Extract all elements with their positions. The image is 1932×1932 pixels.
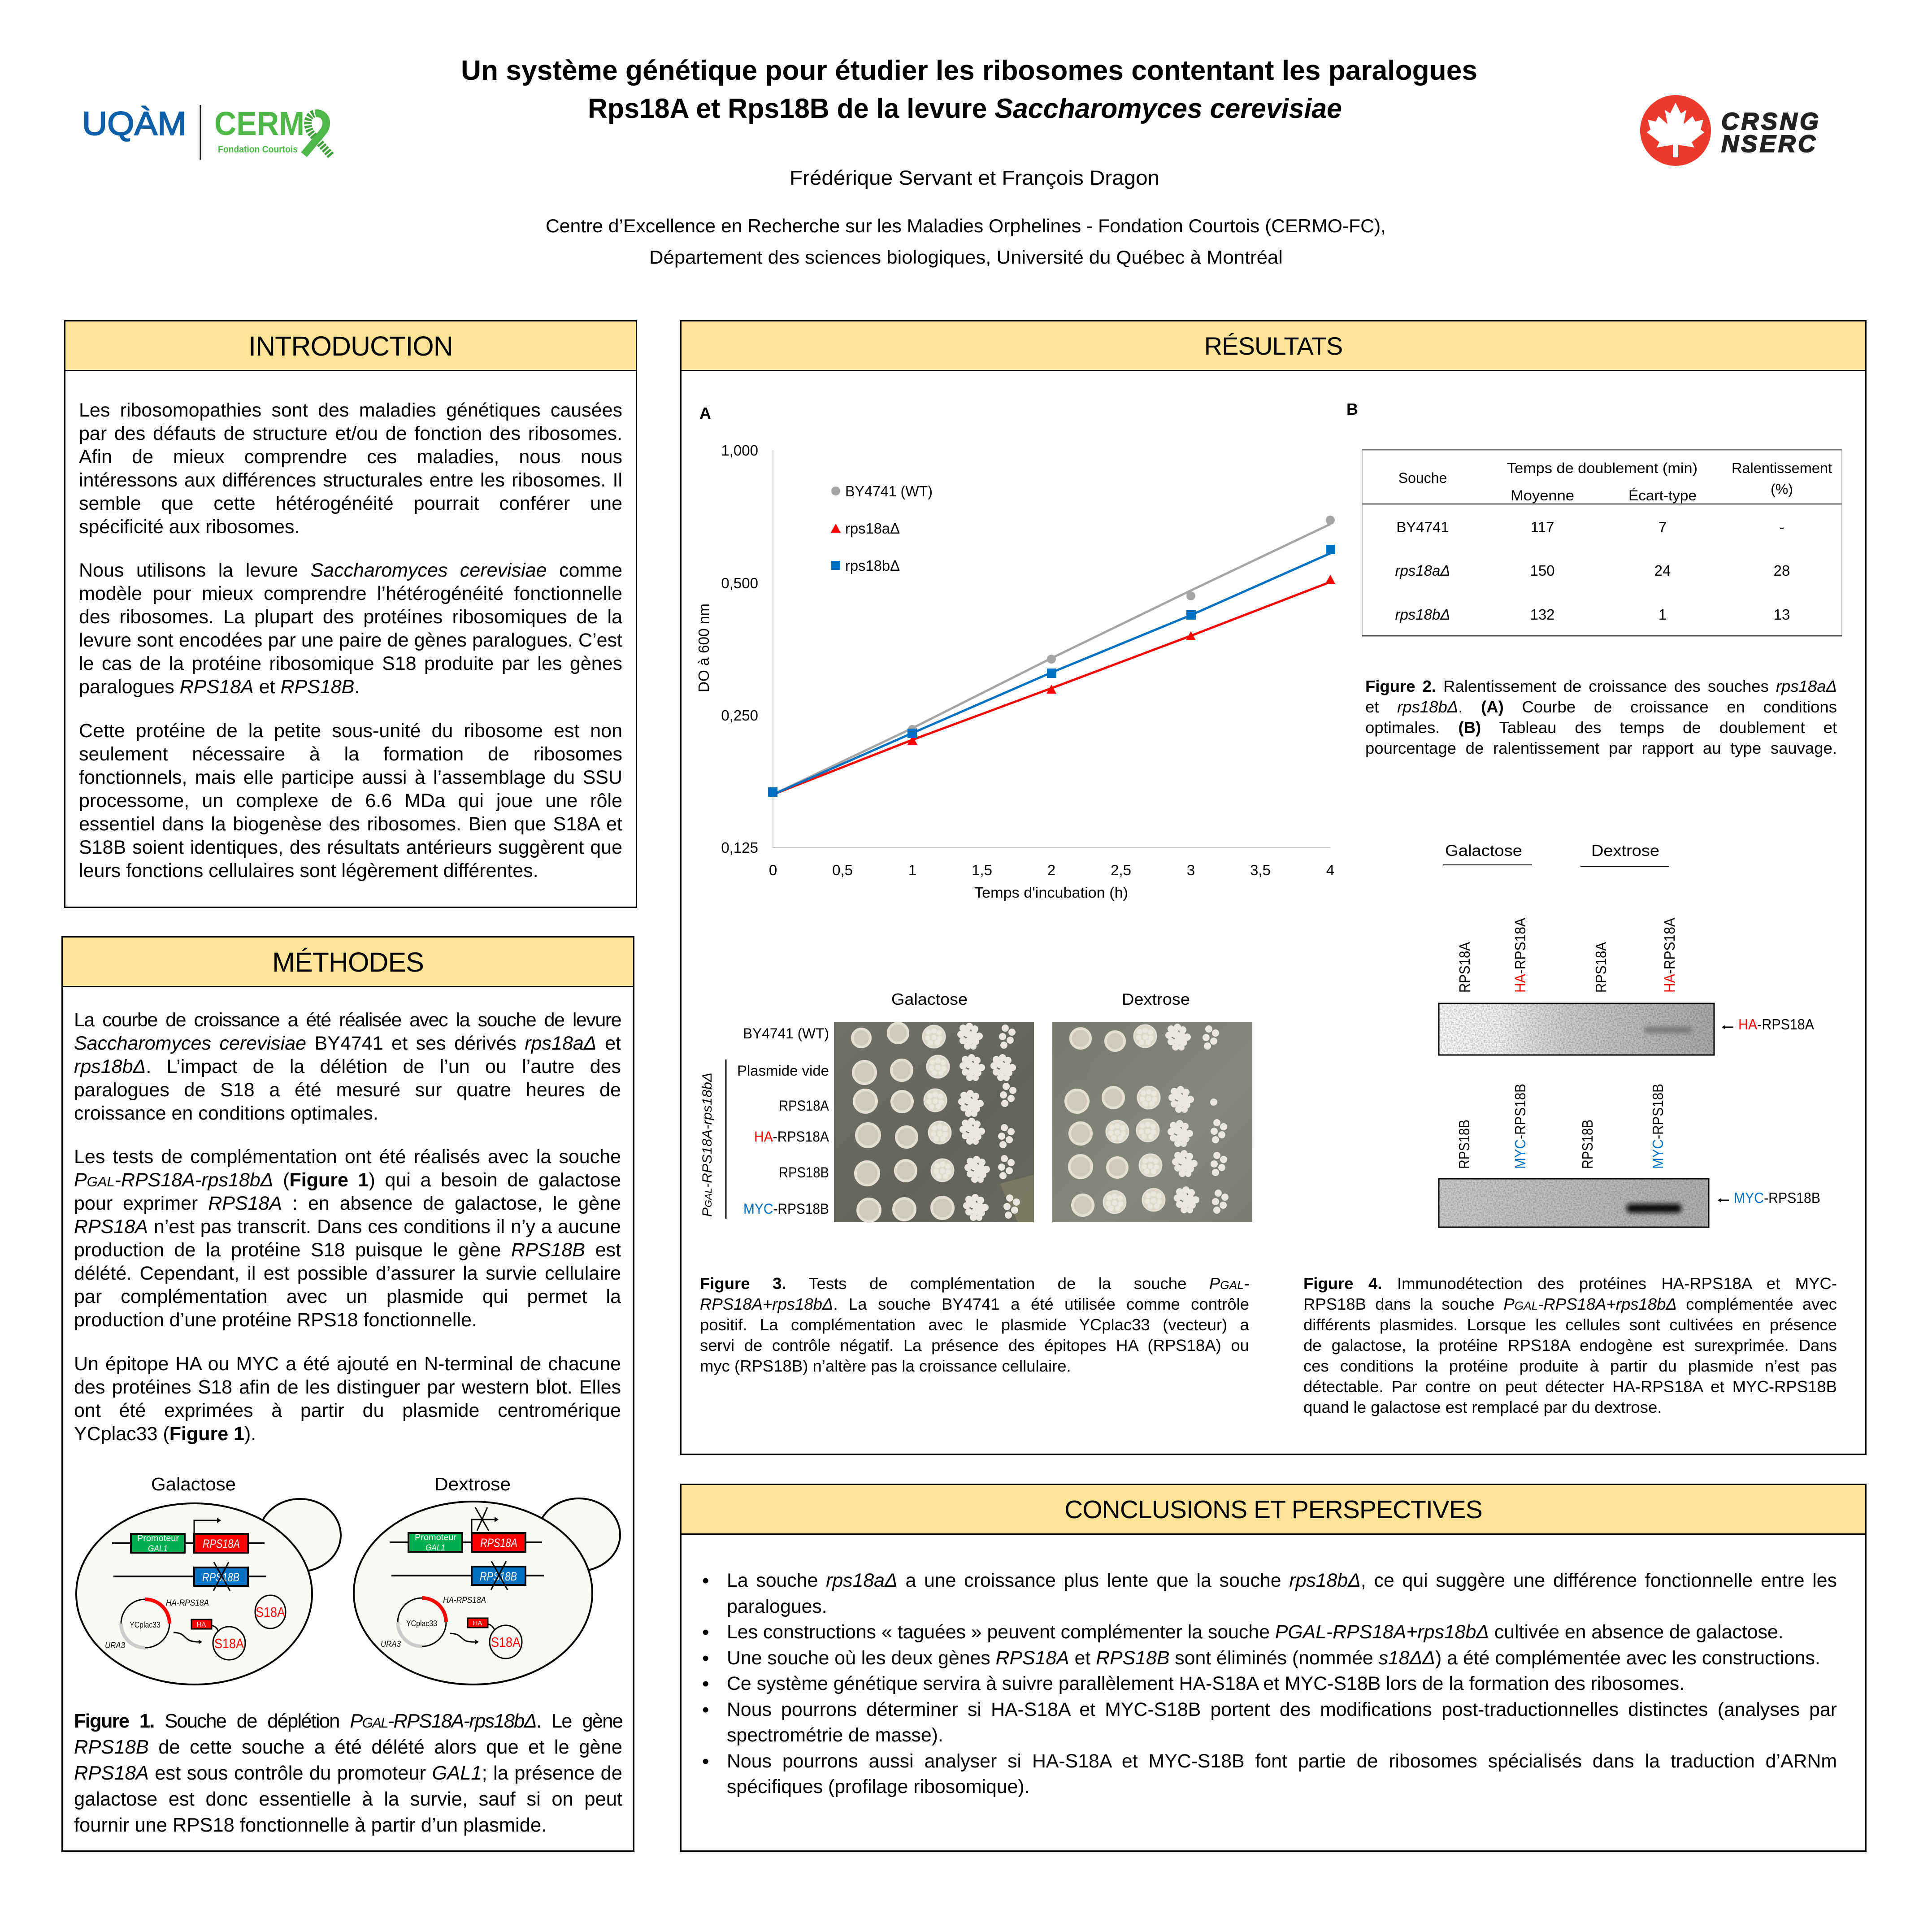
figure 4: western blots <box>1435 838 1829 1233</box>
text block: introduction paragraph 2: le cas de la protéine ribosomique S18 produite par les gènes <box>79 653 622 674</box>
logo text: CRSNG: CRSNG <box>1721 108 1819 135</box>
caption: figure 1: RPS18B de cette souche a été délété alors que et le gène <box>74 1737 622 1758</box>
text block: méthodes paragraph 2: pour exprimer RPS18A : en absence de galactose, le gène <box>74 1193 621 1214</box>
text block: méthodes paragraph 3: ont été exprimées à partir du plasmide centromérique <box>74 1400 621 1421</box>
text block: méthodes paragraph 2 <box>74 1145 621 1332</box>
text block: introduction paragraph 2: des ribosomes. La plupart des protéines ribosomiques de la <box>79 606 622 628</box>
arrow: expression <box>174 1632 199 1642</box>
heading: résultats <box>680 320 1867 371</box>
caption: figure 3: RPS18A+rps18bΔ. La souche BY4741 a été utilisée comme contrôle <box>700 1295 1249 1313</box>
text block: introduction paragraph 3: leurs fonctions cellulaires sont légèrement différentes. <box>79 860 538 881</box>
text block: introduction paragraph 1: par des défauts de structure et/ou de fonction des ribosomes. <box>79 423 622 444</box>
caption: figure 1: Figure 1. Souche de déplétion PGAL-RPS18A-rps18bΔ. Le gène <box>74 1711 622 1732</box>
table header: Temps de doublement (min) <box>1507 460 1698 476</box>
legend: rps18aΔ <box>845 520 900 537</box>
authors and affiliation <box>538 161 1394 269</box>
RPS18B deleted gene box: RPS18B <box>202 1571 239 1584</box>
table rows: - <box>1779 519 1784 535</box>
text block: introduction paragraph 3: essentiel dans la biogenèse des ribosomes. Bien que S18A et <box>79 813 622 835</box>
heading: résultats: RÉSULTATS <box>1204 332 1342 360</box>
text block: méthodes paragraph 3: des protéines S18 afin de les distinguer par western blot. Elles <box>74 1376 621 1398</box>
table header <box>1398 460 1832 504</box>
text block: méthodes paragraph 1: Saccharomyces cerevisiae BY4741 et ses dérivés rps18aΔ et <box>74 1033 621 1054</box>
lane labels: MYC blot <box>1456 1084 1666 1169</box>
label: Dextrose: Dextrose <box>1122 990 1190 1008</box>
text block: méthodes paragraph 2: délété. Cependant, il est possible d’assurer la survie cellulaire <box>74 1263 621 1284</box>
arrow: expression <box>450 1633 476 1642</box>
table: doubling times B <box>1347 399 1854 641</box>
lane labels: HA blot: HA-RPS18A <box>1512 918 1528 993</box>
title <box>448 45 1489 130</box>
plasmid YCplac33 <box>381 1596 486 1649</box>
y axis tick labels: 0,500 <box>721 575 758 591</box>
table header: Moyenne <box>1511 487 1574 504</box>
plasmid YCplac33: URA3 <box>105 1641 125 1650</box>
plasmid YCplac33: YCplac33 <box>406 1619 437 1628</box>
text block: introduction paragraph 3: seulement nécessaire à la formation de ribosomes <box>79 743 622 765</box>
bullet list: conclusions: Les constructions « taguées » peuvent complémenter la souche PGAL-RPS18A+rps18bΔ cultivée en absence de galactose. <box>727 1621 1784 1643</box>
heading: méthodes: MÉTHODES <box>272 947 424 977</box>
cell: galactose <box>76 1499 341 1685</box>
bullet list: conclusions: Une souche où les deux gènes RPS18A et RPS18B sont éliminés (nommée s18ΔΔ) a été complémentée avec les constructions. <box>727 1647 1820 1669</box>
table header: Ralentissement <box>1732 460 1832 476</box>
bullet list: conclusions: Nous pourrons déterminer si HA-S18A et MYC-S18B portent des modifications post-traductionnelles distinctes (analyses par <box>727 1698 1837 1720</box>
text block: introduction paragraph 2: modèle pour mieux comprendre l’hétérogénéité fonctionnelle <box>79 583 622 604</box>
panel: conclusions et perspectives: • <box>702 1647 709 1669</box>
text block: méthodes paragraph 2: RPS18A n’est pas transcrit. Dans ces conditions il n’y a aucune <box>74 1216 621 1237</box>
x axis tick labels: 4 <box>1326 862 1334 878</box>
blot: HA <box>1439 1003 1714 1055</box>
caption: figure 2: et rps18bΔ. (A) Courbe de croissance en conditions <box>1365 698 1837 716</box>
x axis title: Temps d'incubation (h) <box>974 884 1128 901</box>
caption: figure 1: fournir une RPS18 fonctionnelle à partir d’un plasmide. <box>74 1815 547 1836</box>
strain labels <box>737 1025 829 1217</box>
RPS18A gene box <box>472 1533 525 1552</box>
legend: BY4741 (WT) <box>845 483 933 499</box>
lane labels: MYC blot: MYC-RPS18B <box>1650 1084 1666 1169</box>
caption: figure 3: servi de contrôle négatif. La présence des épitopes HA (RPS18A) ou <box>700 1336 1249 1355</box>
caption: figure 3: Figure 3. Tests de complémentation de la souche PGAL- <box>700 1274 1249 1293</box>
strain labels: MYC-RPS18B <box>743 1201 829 1217</box>
logo: CRSNG NSERC <box>1637 92 1825 170</box>
table rows <box>1395 519 1790 623</box>
text block: introduction paragraph 2 <box>79 559 622 699</box>
x axis tick labels: 3,5 <box>1250 862 1271 878</box>
band label: MYC-RPS18B: MYC-RPS18B <box>1734 1190 1820 1206</box>
plate: dextrose <box>1052 1022 1252 1222</box>
bullet list: conclusions: paralogues. <box>727 1595 827 1617</box>
caption: figure 4: différents plasmides. Lorsque les cellules sont cultivées en présence <box>1303 1315 1837 1334</box>
table rows: 24 <box>1654 562 1671 579</box>
plate: galactose <box>834 1022 1034 1222</box>
text block: méthodes paragraph 2: PGAL-RPS18A-rps18bΔ (Figure 1) qui a besoin de galactose <box>74 1169 621 1191</box>
title line 1: Un système génétique pour étudier les ribosomes contentant les paralogues <box>461 55 1477 86</box>
icon: green ribbon <box>304 113 331 156</box>
text block: méthodes paragraph 2: production de la protéine S18 puisque le gène RPS18B est <box>74 1239 621 1261</box>
table rows: 13 <box>1774 606 1790 623</box>
strain labels: HA-RPS18A <box>754 1129 829 1145</box>
table rules <box>1362 450 1842 636</box>
y axis tick labels: 1,000 <box>721 442 758 459</box>
text block: introduction paragraph 3: Cette protéine de la petite sous-unité du ribosome est non <box>79 720 622 742</box>
text block: méthodes paragraph 3: Un épitope HA ou MYC a été ajouté en N-terminal de chacune <box>74 1353 621 1375</box>
figure 1: yeast cell schematics <box>72 1471 628 1695</box>
RPS18B deleted gene box <box>472 1561 525 1590</box>
HA tagged S18A protein: S18A <box>214 1636 244 1651</box>
text block: méthodes paragraph 1 <box>74 1008 621 1125</box>
axes <box>773 450 1330 847</box>
cell: dextrose <box>354 1498 620 1685</box>
panel: introduction <box>64 320 637 908</box>
caption: figure 4: ces conditions la protéine produite à partir du plasmide n’est pas <box>1303 1357 1837 1375</box>
text block: méthodes paragraph 2: production d’une protéine RPS18 fonctionnelle. <box>74 1309 477 1331</box>
bullet list: conclusions: spectrométrie de masse). <box>727 1724 943 1746</box>
caption: figure 2: optimales. (B) Tableau des temps de doublement et <box>1365 718 1837 737</box>
panel: conclusions et perspectives: • <box>702 1698 709 1721</box>
text block: introduction paragraph 1 <box>79 399 622 538</box>
series: rps18a red <box>773 575 1335 795</box>
caption: figure 4: RPS18B dans la souche PGAL-RPS18A+rps18bΔ complémentée avec <box>1303 1295 1837 1313</box>
arrow: transcription blocked <box>472 1507 499 1533</box>
HA tagged S18A protein: S18A <box>491 1634 521 1650</box>
caption: figure 4: Figure 4. Immunodétection des protéines HA-RPS18A et MYC- <box>1303 1274 1837 1293</box>
promoter GAL1 box <box>408 1533 462 1553</box>
caption: figure 2 <box>1365 676 1837 759</box>
text block: introduction paragraph 1: intéressons aux différences structurales entre les ribosomes. Il <box>79 469 622 491</box>
table rows: rps18aΔ <box>1395 562 1450 579</box>
caption: figure 4: de galactose, la protéine RPS18A endogène est surexprimée. Dans <box>1303 1336 1837 1355</box>
text block: méthodes paragraph 3 <box>74 1352 621 1446</box>
logo text: CERM: CERM <box>214 105 304 142</box>
caption: figure 2: pourcentage de ralentissement par rapport au type sauvage. <box>1365 739 1837 757</box>
plasmid YCplac33 <box>105 1598 209 1650</box>
table rows: 28 <box>1774 562 1790 579</box>
text block: introduction paragraph 1: semble que cette hétérogénéité pourrait conférer une <box>79 493 622 514</box>
heading: introduction: INTRODUCTION <box>248 331 453 361</box>
caption: figure 3: myc (RPS18B) n’altère pas la croissance cellulaire. <box>700 1357 1071 1375</box>
text block: introduction paragraph 1: Afin de mieux comprendre ces maladies, nous nous <box>79 446 622 468</box>
table rows: 150 <box>1530 562 1555 579</box>
caption: figure 4: détectable. Par contre on peut détecter HA-RPS18A et MYC-RPS18B <box>1303 1377 1837 1396</box>
x axis tick labels: 0 <box>769 862 777 878</box>
text block: introduction paragraph 3: S18B soient identiques, des résultats antérieurs suggèrent que <box>79 837 622 858</box>
legend: rps18bΔ <box>845 557 900 574</box>
title line 2: Rps18A et Rps18B de la levure Saccharomyces cerevisiae <box>588 93 1342 124</box>
text block: introduction paragraph 1: spécificité aux ribosomes. <box>79 516 300 538</box>
strain labels: Plasmide vide <box>737 1063 829 1079</box>
text block: méthodes paragraph 1: paralogues de S18 a été mesuré sur quatre heures de <box>74 1079 621 1101</box>
text block: introduction paragraph 3: processome, un complexe de 6.6 MDa qui joue une rôle <box>79 790 622 812</box>
panel: conclusions et perspectives: • <box>702 1570 709 1592</box>
lane labels: MYC blot: MYC-RPS18B <box>1512 1084 1528 1169</box>
promoter GAL1 box: GAL1 <box>425 1543 445 1553</box>
bullet list: conclusions <box>727 1568 1837 1800</box>
band label: HA-RPS18A: HA-RPS18A <box>1738 1016 1814 1033</box>
lane labels: MYC blot: RPS18B <box>1579 1120 1596 1169</box>
RPS18A gene box: RPS18A <box>480 1536 517 1550</box>
bracket line and rotated label: PGAL-RPS18A-rps18bΔ <box>700 1072 715 1217</box>
promoter GAL1 box <box>131 1534 185 1554</box>
table rows: 7 <box>1658 519 1667 535</box>
text block: méthodes paragraph 2: par complémentation avec un plasmide qui permet la <box>74 1286 621 1307</box>
text block: méthodes paragraph 3: YCplac33 (Figure 1). <box>74 1423 256 1445</box>
lane labels: MYC blot: RPS18B <box>1456 1120 1472 1169</box>
text block: introduction paragraph 1: Les ribosomopathies sont des maladies génétiques causées <box>79 399 622 421</box>
plasmid YCplac33: YCplac33 <box>130 1620 161 1629</box>
bullet list: conclusions: Ce système génétique servira à suivre parallèlement HA-S18A et MYC-S18B lors de la formation des ribosomes. <box>727 1673 1685 1694</box>
RPS18A gene box <box>194 1534 248 1553</box>
x axis tick labels: 0,5 <box>832 862 853 878</box>
table rows: rps18bΔ <box>1395 606 1450 623</box>
text block: méthodes paragraph 1: rps18bΔ. L’impact de la délétion de l’un ou l’autre des <box>74 1056 621 1077</box>
plasmid YCplac33: HA-RPS18A <box>443 1596 486 1605</box>
affiliation line 2: Département des sciences biologiques, Université du Québec à Montréal <box>649 247 1283 268</box>
panel letter B: B <box>1346 400 1358 418</box>
logo: UQAM and CERMO Fondation Courtois <box>76 101 341 166</box>
HA tagged S18A protein <box>468 1618 522 1658</box>
logo text: Fondation Courtois: Fondation Courtois <box>218 144 298 155</box>
promoter GAL1 box: Promoteur <box>415 1533 457 1542</box>
RPS18B deleted gene box: RPS18B <box>480 1570 517 1583</box>
text block: introduction paragraph 2: levure sont encodées par une paire de gènes paralogues. C’est <box>79 630 622 651</box>
HA tagged S18A protein <box>191 1619 245 1660</box>
bullet list: conclusions: La souche rps18aΔ a une croissance plus lente que la souche rps18bΔ, ce qui suggère une différence fonctionnelle entre les <box>727 1570 1837 1591</box>
label: Galactose: Galactose <box>1445 842 1522 860</box>
label: Galactose: Galactose <box>891 990 968 1008</box>
y axis title: DO à 600 nm <box>695 603 712 692</box>
plasmid YCplac33: HA-RPS18A <box>166 1598 209 1608</box>
caption: figure 4: quand le galactose est remplacé par du dextrose. <box>1303 1398 1662 1416</box>
strain labels: RPS18A <box>779 1098 829 1114</box>
chart: growth curve A <box>690 399 1345 906</box>
endogenous S18A protein: S18A <box>256 1604 285 1620</box>
panel: conclusions et perspectives: • <box>702 1621 709 1643</box>
logo text: NSERC: NSERC <box>1721 130 1816 157</box>
text block: introduction paragraph 2: paralogues RPS18A et RPS18B. <box>79 676 360 698</box>
HA tagged S18A protein: HA <box>473 1619 482 1627</box>
text block: méthodes paragraph 2: Les tests de complémentation ont été réalisés avec la souche <box>74 1146 621 1168</box>
x axis tick labels <box>769 862 1334 878</box>
caption: figure 4 <box>1303 1273 1837 1418</box>
heading: conclusions et perspectives: CONCLUSIONS ET PERSPECTIVES <box>1064 1495 1482 1524</box>
x axis tick labels: 2,5 <box>1111 862 1131 878</box>
x axis tick labels: 3 <box>1187 862 1195 878</box>
lane labels: HA blot: RPS18A <box>1593 942 1609 993</box>
blot: MYC <box>1439 1179 1709 1227</box>
panel letter A: A <box>699 404 711 422</box>
table header: Souche <box>1398 470 1447 486</box>
panel: méthodes <box>61 936 634 1852</box>
panel: résultats <box>680 320 1867 1455</box>
label: Galactose: Galactose <box>151 1474 236 1494</box>
arrow: transcription on <box>194 1520 218 1534</box>
panel: conclusions et perspectives: • <box>702 1673 709 1695</box>
lane labels: HA blot: RPS18A <box>1456 942 1473 993</box>
panel: conclusions et perspectives <box>680 1484 1867 1852</box>
x axis tick labels: 1,5 <box>972 862 992 878</box>
RPS18B deleted gene box <box>194 1562 248 1591</box>
promoter GAL1 box: GAL1 <box>148 1544 168 1554</box>
lane labels: HA blot: HA-RPS18A <box>1661 918 1678 993</box>
table rows: BY4741 <box>1396 519 1449 535</box>
legend <box>831 483 933 574</box>
caption: figure 3 <box>700 1273 1249 1376</box>
HA tagged S18A protein: HA <box>197 1621 206 1628</box>
y axis tick labels: 0,250 <box>721 707 758 724</box>
y axis tick labels <box>721 442 758 856</box>
plasmid YCplac33: URA3 <box>381 1640 401 1649</box>
y axis tick labels: 0,125 <box>721 839 758 856</box>
figure 3: complementation plates <box>695 982 1260 1229</box>
table header: Écart-type <box>1628 487 1697 504</box>
bullet list: conclusions: Nous pourrons aussi analyser si HA-S18A et MYC-S18B font partie de ribosomes spécialisés dans la traduction d’ARNm <box>727 1750 1837 1772</box>
x axis tick labels: 2 <box>1047 862 1055 878</box>
table rows: 1 <box>1658 606 1667 623</box>
strain labels: BY4741 (WT) <box>743 1025 829 1042</box>
series: BY4741 grey <box>773 516 1335 795</box>
strain labels: RPS18B <box>779 1164 829 1181</box>
caption: figure 1 <box>74 1708 622 1838</box>
panel: conclusions et perspectives: • <box>702 1750 709 1772</box>
caption: figure 1: RPS18A est sous contrôle du promoteur GAL1; la présence de <box>74 1763 622 1784</box>
logo text: UQÀM: UQÀM <box>82 105 187 142</box>
x axis tick labels: 1 <box>908 862 916 878</box>
bullet list: conclusions: spécifiques (profilage ribosomique). <box>727 1776 1030 1797</box>
text block: méthodes paragraph 1: croissance en conditions optimales. <box>74 1103 378 1124</box>
text block: méthodes paragraph 1: La courbe de croissance a été réalisée avec la souche de levure <box>74 1009 621 1031</box>
heading: méthodes <box>61 936 634 987</box>
lane labels: HA blot <box>1456 918 1678 993</box>
caption: figure 2: Figure 2. Ralentissement de croissance des souches rps18aΔ <box>1365 677 1837 695</box>
table rows: 117 <box>1531 519 1554 535</box>
caption: figure 1: galactose est donc essentielle à la survie, sauf si on peut <box>74 1789 622 1810</box>
endogenous S18A protein <box>255 1595 286 1628</box>
label: Dextrose: Dextrose <box>1591 842 1659 860</box>
label: Dextrose: Dextrose <box>434 1474 511 1494</box>
text block: introduction paragraph 2: Nous utilisons la levure Saccharomyces cerevisiae comme <box>79 560 622 581</box>
heading: conclusions et perspectives <box>680 1484 1867 1535</box>
caption: figure 3: positif. La complémentation avec le plasmide YCplac33 (vecteur) a <box>700 1315 1249 1334</box>
RPS18A gene box: RPS18A <box>203 1537 240 1550</box>
series: rps18b blue <box>768 545 1335 797</box>
affiliation line 1: Centre d’Excellence en Recherche sur les Maladies Orphelines - Fondation Courtois (CERMO-FC), <box>546 215 1386 236</box>
promoter GAL1 box: Promoteur <box>137 1534 179 1543</box>
heading: introduction <box>64 320 637 371</box>
text block: introduction paragraph 3: fonctionnels, mais elle participe aussi à l’assemblage du SSU <box>79 767 622 788</box>
table header: (%) <box>1771 481 1793 497</box>
text block: introduction paragraph 3 <box>79 719 622 882</box>
authors: Frédérique Servant et François Dragon <box>790 166 1159 189</box>
table rows: 132 <box>1530 606 1555 623</box>
icon: red circle with maple leaf <box>1640 95 1711 166</box>
